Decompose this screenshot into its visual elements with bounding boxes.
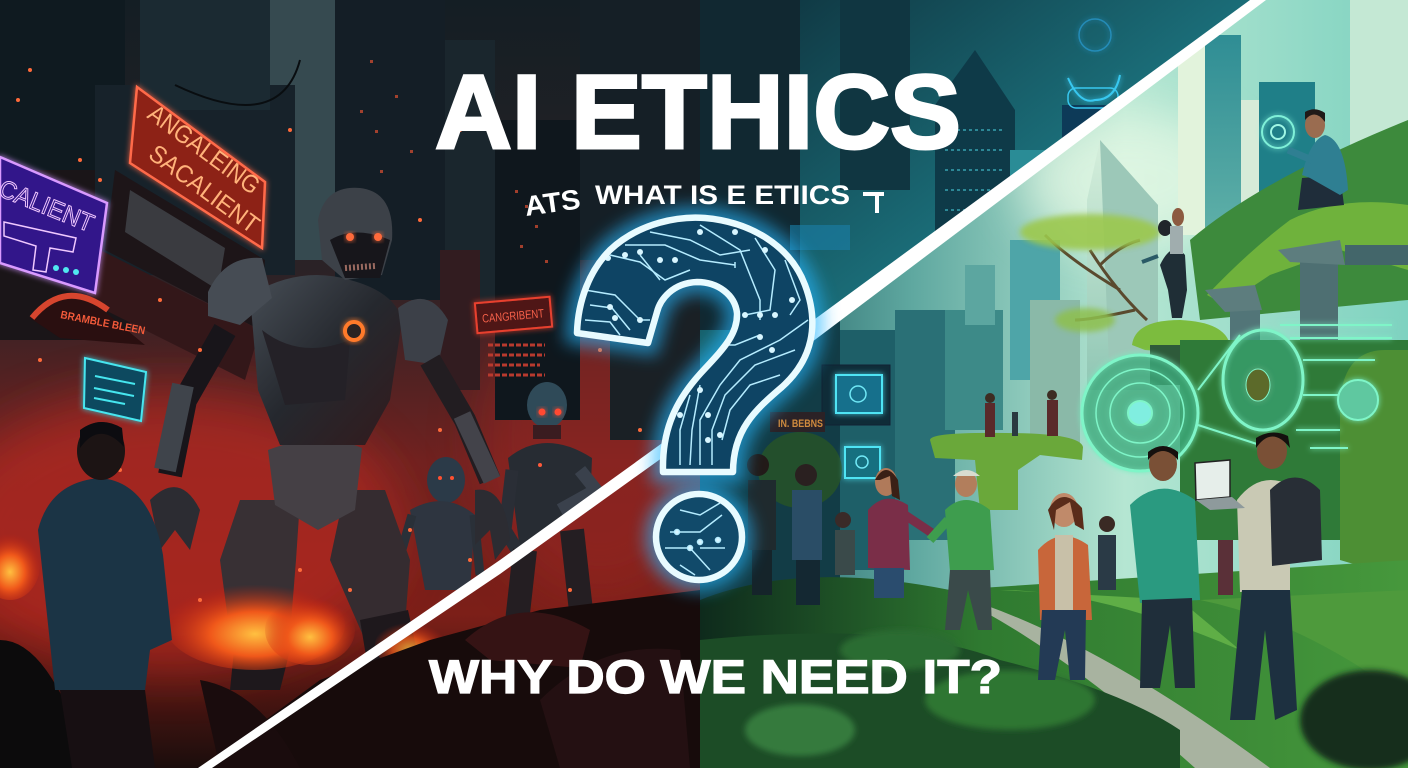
distant city — [700, 240, 1080, 600]
neon sign: cyan — [84, 358, 146, 421]
distant crowd on platform — [985, 390, 1058, 437]
fire — [0, 530, 445, 670]
background people — [747, 454, 1233, 605]
neon sign: small red — [475, 297, 552, 375]
subtitle start: ATS — [523, 183, 582, 222]
ground and bushes — [700, 560, 1408, 768]
green holographic display — [1082, 325, 1392, 471]
man in teal sweater — [1130, 446, 1200, 688]
women on mound — [1142, 208, 1187, 318]
neon marquee — [30, 295, 146, 345]
bottom question: WHY DO WE NEED IT? — [429, 650, 1002, 703]
question mark with circuit pattern — [577, 218, 812, 581]
neon sign: red: ANGALEING — [142, 99, 265, 200]
main robot — [150, 188, 510, 690]
subtitle: WHAT IS E ETIICS — [595, 180, 850, 210]
debris ground — [0, 590, 700, 768]
balcony under signs — [85, 170, 265, 380]
man seated on mound — [1288, 109, 1348, 210]
background robot: small — [396, 457, 480, 590]
neon sign: red — [130, 87, 265, 248]
dystopian left background — [0, 0, 720, 768]
embers — [16, 68, 642, 602]
neon marquee: BRAMBLE BLEEN — [59, 309, 146, 337]
cyan panels — [770, 365, 890, 478]
upper right city wedge — [700, 0, 1250, 369]
dark skyscrapers — [0, 0, 700, 440]
man with backpack and laptop — [1195, 432, 1322, 720]
person in hoodie — [38, 422, 172, 768]
hanging vines — [758, 432, 842, 508]
bracket mark — [863, 194, 884, 213]
dot circuit — [665, 500, 725, 575]
cyan panels: IN. BEBNS — [778, 418, 823, 430]
hologram heart — [1068, 19, 1120, 108]
pale skyscrapers — [1087, 0, 1408, 390]
neon sign: small red: CANGRIBENT — [482, 306, 545, 326]
circuit traces — [585, 225, 808, 465]
diagonal white divider — [198, 0, 1266, 768]
tree — [1020, 214, 1160, 332]
background robot: right — [505, 382, 596, 640]
woman in maroon jacket — [868, 468, 935, 598]
circuit nodes — [605, 229, 795, 443]
man in green shirt — [930, 470, 994, 630]
title: AI ETHICS — [435, 54, 961, 171]
neon sign: red: SACALIENT — [143, 139, 265, 239]
green mounds and pillars — [930, 120, 1408, 580]
building windows — [360, 60, 548, 263]
neon sign: purple — [0, 157, 107, 293]
wedge skyscrapers — [700, 0, 1122, 330]
lower right eco scene — [700, 0, 1408, 768]
woman in orange jacket — [1038, 493, 1092, 680]
